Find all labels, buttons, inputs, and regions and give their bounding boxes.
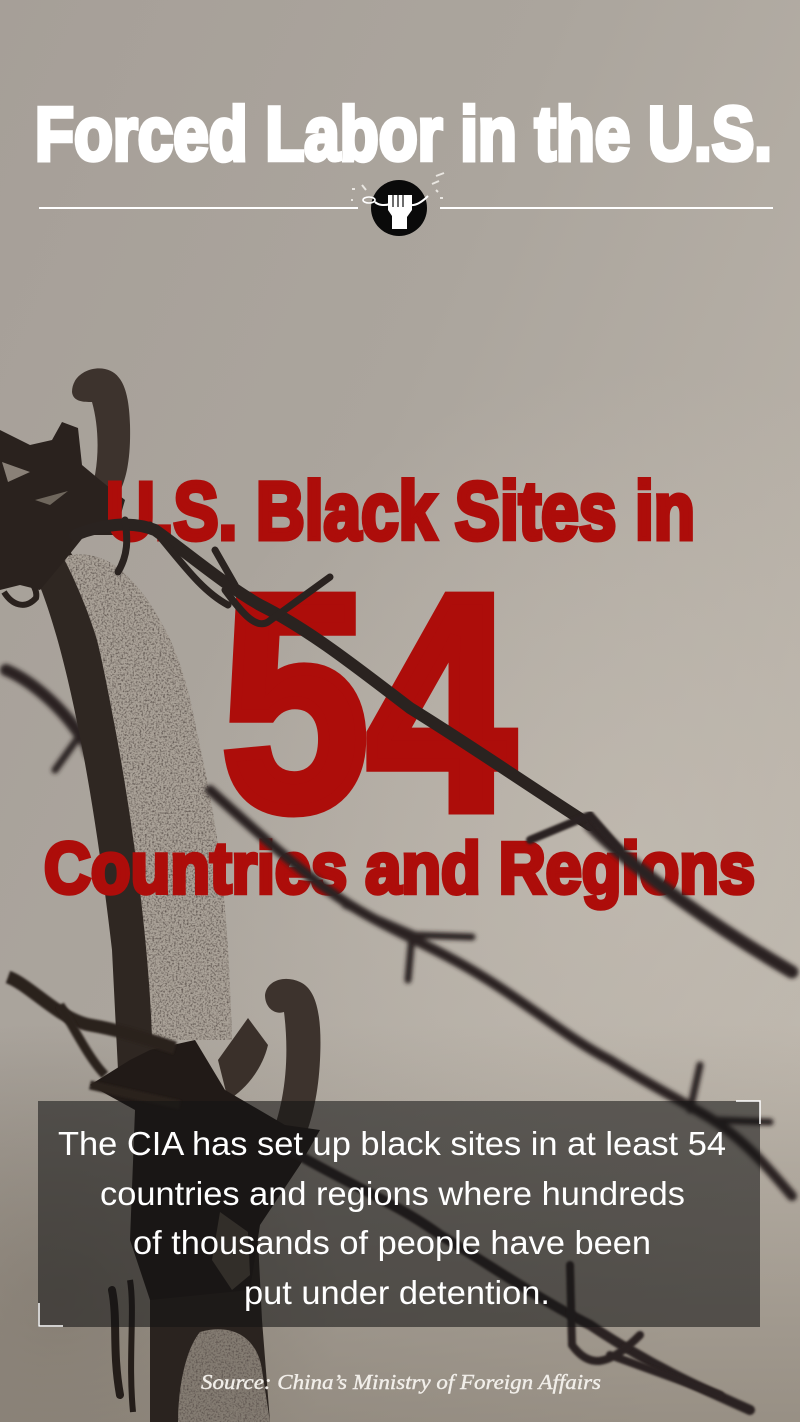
post light face (63, 554, 232, 1040)
body text (58, 1125, 726, 1311)
text panel (38, 1101, 760, 1327)
corner bracket bottom left (39, 1303, 63, 1326)
body text: countries and regions where hundreds (100, 1175, 685, 1212)
body text: The CIA has set up black sites in at least 54 (58, 1125, 726, 1162)
fence post (28, 540, 270, 1422)
body text: of thousands of people have been (133, 1224, 651, 1261)
title rule left (39, 207, 358, 209)
body text: put under detention. (244, 1274, 550, 1311)
title rule right (440, 207, 773, 209)
source: Source: China’s Ministry of Foreign Affairs (201, 1370, 601, 1394)
post lower (150, 1180, 270, 1422)
icon: raised fist breaking chain (351, 173, 444, 236)
top hook and knot (0, 368, 130, 605)
corner bracket top right (736, 1101, 760, 1124)
lower hook and wire knot (8, 977, 320, 1412)
blurred left wire behind post (6, 670, 150, 790)
blurred middle wire (210, 790, 792, 1196)
sharp barbed wire over text (75, 520, 792, 972)
lower barbed wire (290, 1150, 750, 1410)
post dark side (28, 540, 170, 1070)
big number: 54: 54 (222, 532, 516, 873)
